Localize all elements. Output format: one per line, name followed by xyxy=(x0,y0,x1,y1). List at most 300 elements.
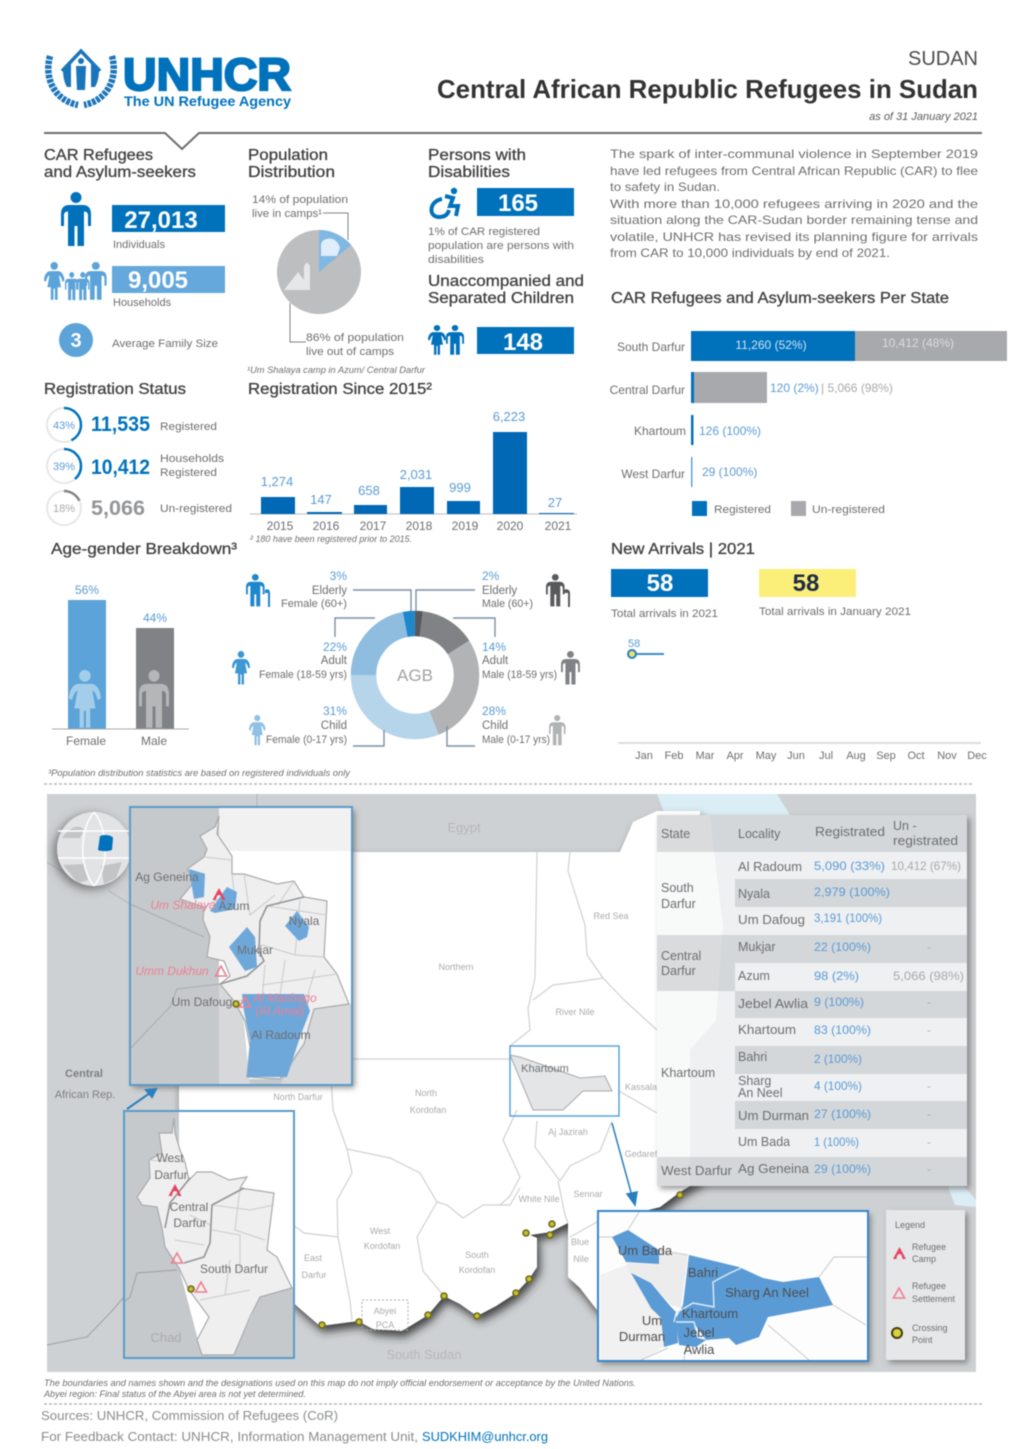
table locality column: Azum xyxy=(738,969,770,983)
text: disability note: population are persons with xyxy=(428,240,574,252)
legend xyxy=(692,501,885,516)
table un-registered column: 5,066 (98%) xyxy=(893,969,964,983)
arrow: to locality inset xyxy=(127,1089,156,1109)
table locality column xyxy=(738,860,809,1176)
stat: households: 9,005 xyxy=(128,267,188,294)
map legend xyxy=(886,1210,965,1360)
bar chart: gender: 56% xyxy=(75,583,99,597)
map base: neighbouring countries xyxy=(47,794,976,1372)
panel: refugees per state xyxy=(610,290,1007,516)
table un-registered column: 10,412 (67%) xyxy=(891,859,961,873)
map: Chad and CAR border xyxy=(47,1297,124,1345)
stat: registered: Registered xyxy=(160,421,217,433)
map: state boundaries xyxy=(293,852,657,1320)
heading xyxy=(248,147,335,181)
table un-registered column: - xyxy=(927,1109,931,1121)
stacked bar chart: 126 (100%) xyxy=(699,424,761,438)
table state column: Central xyxy=(661,949,701,963)
heading: Unaccompanied and xyxy=(428,273,584,290)
label: adult female: Adult xyxy=(321,655,348,667)
line chart: Apr xyxy=(726,750,744,762)
inset: refugee localities map xyxy=(130,807,352,1085)
bar chart: 2017 xyxy=(360,519,387,533)
table registered column: 22 (100%) xyxy=(814,940,871,954)
table locality column: Al Radoum xyxy=(738,860,802,874)
table state column: Darfur xyxy=(661,897,696,911)
heading: New Arrivals | 2021 xyxy=(611,541,755,558)
map labels: countries and states: East xyxy=(304,1253,323,1263)
map: state labels: Central xyxy=(170,1200,208,1214)
label: elderly female xyxy=(281,569,347,610)
label: child male: 28% xyxy=(482,704,506,718)
icon: male xyxy=(139,670,169,728)
map labels: countries and states: West xyxy=(370,1226,391,1236)
stat: households registered: Households xyxy=(160,453,225,465)
icon: camp Um Shalaya xyxy=(212,888,226,900)
table un-registered column: - xyxy=(927,1025,931,1037)
icon: settlement Umm Dukhun xyxy=(216,966,226,976)
map: locality labels: Al Mashago xyxy=(252,991,317,1005)
sources and contact: SUDKHIM@unhcr.org xyxy=(422,1429,548,1444)
line chart: Dec xyxy=(967,750,987,762)
stat: individuals: 27,013 xyxy=(124,207,198,234)
heading: Registration Status xyxy=(44,381,186,398)
stat: arrivals January 2021 xyxy=(759,569,911,618)
icon: adult female xyxy=(232,651,250,684)
table locality column: Jebel Awlia xyxy=(738,997,808,1011)
map labels: countries and states: African Rep. xyxy=(55,1089,115,1101)
map labels: countries and states: South Sudan xyxy=(386,1347,462,1362)
label: in camps xyxy=(252,194,348,220)
map labels: countries and states: South xyxy=(465,1250,489,1260)
table state column: West Darfur xyxy=(661,1164,732,1178)
map labels: countries and states: Central xyxy=(65,1068,103,1080)
icon: wheelchair xyxy=(431,188,458,217)
bar chart: 6,223 xyxy=(493,409,525,424)
map legend: Settlement xyxy=(912,1294,956,1304)
map: Darfur states xyxy=(137,1118,292,1355)
label: elderly male xyxy=(482,569,533,610)
map: locality labels: Ag Geneina xyxy=(135,870,199,884)
table locality column: Um Dafoug xyxy=(738,913,805,927)
text block: situation summary: situation along the CAR-Sudan border remaining tense and xyxy=(610,213,978,227)
bar chart: gender: Female xyxy=(66,734,106,748)
map labels: countries and states: Aj Jazirah xyxy=(548,1127,588,1137)
icon: crossing points on border xyxy=(318,1191,684,1329)
line chart: Aug xyxy=(846,750,866,762)
map labels: countries and states: Egypt xyxy=(447,820,481,835)
table header: Un - xyxy=(893,819,917,833)
table header xyxy=(661,819,958,848)
stat: average family size xyxy=(59,323,218,357)
label: out of camps xyxy=(306,332,404,358)
icon: children xyxy=(428,325,464,355)
table locality column: Khartoum xyxy=(738,1023,796,1037)
table un-registered column: - xyxy=(927,1164,931,1176)
label: out of camps: 86% of population xyxy=(306,332,404,344)
globe locator xyxy=(57,812,131,886)
map legend: Refugee xyxy=(912,1281,946,1291)
icon: crossing South Darfur xyxy=(187,1285,195,1293)
bar chart: 2020 xyxy=(497,519,524,533)
map: state labels: West xyxy=(156,1151,184,1165)
heading: Distribution xyxy=(248,164,335,181)
title block: Central African Republic Refugees in Sudan xyxy=(437,74,978,104)
table registered column: 83 (100%) xyxy=(814,1023,871,1037)
map labels: countries and states: Northern xyxy=(438,962,474,972)
icon: female xyxy=(69,670,101,728)
map: state labels: South Darfur xyxy=(200,1262,268,1276)
label: elderly male: Elderly xyxy=(482,585,517,597)
label: elderly male: Male (60+) xyxy=(482,598,533,610)
label: child female: Female (0-17 yrs) xyxy=(266,734,347,746)
map labels: countries and states xyxy=(55,820,658,1362)
table registered column: 5,090 (33%) xyxy=(814,859,885,873)
table registered column: 3,191 (100%) xyxy=(814,911,882,925)
stacked bar chart: South Darfur xyxy=(617,340,685,354)
line chart: 58 xyxy=(628,638,640,650)
map: locality labels: Durman xyxy=(619,1329,665,1344)
stat: 148 xyxy=(477,327,574,356)
stacked bar chart: West Darfur xyxy=(621,467,685,481)
header rule with notch xyxy=(44,133,982,149)
map labels: countries and states: Blue xyxy=(571,1237,589,1247)
stat: un-registered: 18% xyxy=(53,503,75,515)
heading: CAR Refugees and Asylum-seekers Per State xyxy=(611,290,949,307)
bar chart: 999 xyxy=(449,480,471,495)
map labels: countries and states: Gedaref xyxy=(625,1149,658,1159)
label: adult male: 14% xyxy=(482,640,506,654)
panel: registration status xyxy=(44,381,232,525)
map: locality labels: Awlia xyxy=(684,1342,715,1357)
footnote: ² 180 have been registered prior to 2015. xyxy=(250,534,412,544)
stat: registered: 43% xyxy=(53,420,75,432)
donut chart xyxy=(364,624,466,726)
table registered column: 2 (100%) xyxy=(814,1052,862,1066)
heading xyxy=(44,147,196,181)
heading: Separated Children xyxy=(428,290,574,307)
map: locality labels: Um Dafoug xyxy=(172,995,232,1009)
table header: registrated xyxy=(893,834,958,848)
map labels: countries and states: PCA xyxy=(376,1320,394,1330)
table locality column: Bahri xyxy=(738,1050,767,1064)
icon: elderly female xyxy=(246,574,270,607)
footnote: ¹Um Shalaya camp in Azum/ Central Darfur xyxy=(247,365,426,375)
stat: arrivals January 2021: Total arrivals in January 2021 xyxy=(759,606,911,618)
label: in camps: live in camps¹ xyxy=(252,208,322,220)
icon: elderly male xyxy=(546,574,570,607)
map: locality labels: Khartoum xyxy=(682,1306,738,1321)
table state column: Darfur xyxy=(661,964,696,978)
bar chart: 27 xyxy=(548,495,562,510)
stat: 165: 165 xyxy=(498,190,538,217)
label: child male xyxy=(482,704,550,746)
icon: crossing point xyxy=(891,1327,903,1339)
text block: situation summary: The spark of inter-communal violence in September 2019 xyxy=(610,147,978,161)
label: child female xyxy=(266,704,347,746)
arrow: to Khartoum inset xyxy=(612,1123,637,1205)
stacked bar chart: | 5,066 (98%) xyxy=(821,381,893,395)
label: adult male xyxy=(482,640,557,681)
map labels: countries and states: Kordofan xyxy=(410,1105,446,1115)
stacked bar chart: 29 (100%) xyxy=(702,465,757,479)
stat: households: Households xyxy=(113,297,172,309)
panel: CAR refugees and asylum-seekers xyxy=(44,147,225,357)
table locality column: Um Durman xyxy=(738,1109,809,1123)
stacked bar chart: 10,412 (48%) xyxy=(882,336,954,350)
inset locator: Khartoum state: Khartoum xyxy=(521,1063,569,1075)
map panel xyxy=(47,794,976,1372)
table registered column: 4 (100%) xyxy=(814,1079,862,1093)
heading: Population xyxy=(248,147,328,164)
bar chart: 2,031 xyxy=(400,467,432,482)
bar chart: gender: 44% xyxy=(143,611,167,625)
stacked bar chart: 11,260 (52%) xyxy=(735,338,807,352)
stat: arrivals January 2021: 58 xyxy=(793,570,819,597)
text block: situation summary: With more than 10,000 refugees arriving in 2020 and the xyxy=(610,197,978,211)
label: child female: Child xyxy=(321,720,347,732)
map labels: countries and states: Sennar xyxy=(573,1189,603,1199)
text block: situation summary: have led refugees from Central African Republic (CAR) to flee xyxy=(610,164,978,178)
table un-registered column xyxy=(891,859,964,1176)
legend: Un-registered xyxy=(812,504,885,516)
stat: households registered: 39% xyxy=(53,461,75,473)
footnote: ³Population distribution statistics are based on registered individuals only xyxy=(48,768,351,778)
line chart xyxy=(618,638,987,762)
icon: adult male xyxy=(561,651,580,684)
icon: crossing Um Dafoug xyxy=(232,1000,240,1008)
map labels: countries and states: Kassala xyxy=(625,1082,657,1092)
logo: UNHCR xyxy=(48,49,291,109)
text block: situation summary xyxy=(610,147,978,260)
icon: settlement Al Mashago xyxy=(240,997,250,1007)
label: elderly female: 3% xyxy=(330,569,347,583)
map labels: countries and states: Nile xyxy=(573,1254,589,1264)
bar chart: 2015 xyxy=(267,519,294,533)
stat: average family size: 3 xyxy=(70,330,82,352)
title block xyxy=(437,48,978,123)
label: adult male: Adult xyxy=(482,655,509,667)
map: locality labels: Nyala xyxy=(289,914,320,928)
map: locality labels: Um xyxy=(642,1313,662,1328)
map legend: Point xyxy=(912,1335,933,1345)
table locality column: Um Bada xyxy=(738,1135,790,1149)
line chart: May xyxy=(756,750,777,762)
sources and contact: Sources: UNHCR, Commission of Refugees (CoR) xyxy=(41,1408,338,1423)
map: locality labels: Um Bada xyxy=(618,1243,673,1258)
stat: households registered: 10,412 xyxy=(91,456,150,479)
map labels: countries and states: River Nile xyxy=(555,1007,595,1017)
label: in camps: 14% of population xyxy=(252,194,348,206)
logo wordmark: UNHCR xyxy=(123,49,291,100)
bar chart: 2021 xyxy=(545,519,572,533)
table un-registered column: - xyxy=(927,1137,931,1149)
bar chart: gender: Male xyxy=(141,734,167,748)
map labels: countries and states: Kordofan xyxy=(364,1241,400,1251)
stacked bar chart: 120 (2%) xyxy=(770,381,819,395)
map: locality labels: Bahri xyxy=(688,1265,718,1280)
line chart: Nov xyxy=(937,750,957,762)
bar chart xyxy=(250,409,577,533)
map legend: Camp xyxy=(912,1254,936,1264)
table header: Locality xyxy=(738,827,781,841)
icon: settlement Central Darfur xyxy=(172,1253,182,1263)
icon: camp West Darfur xyxy=(168,1184,182,1196)
bar chart: 2019 xyxy=(452,519,479,533)
label: child male: Male (0-17 yrs) xyxy=(482,734,550,746)
table un-registered column: - xyxy=(927,997,931,1009)
table state column: Khartoum xyxy=(661,1066,715,1080)
stat: total arrivals 2021 xyxy=(611,569,718,620)
bar chart: 147 xyxy=(310,492,332,507)
label: elderly female: Elderly xyxy=(312,585,347,597)
text block: situation summary: volatile, UNHCR has revised its planning figure for arrivals xyxy=(610,230,978,244)
label: adult female: 22% xyxy=(323,640,347,654)
stat: average family size: Average Family Size xyxy=(112,338,218,350)
label: child male: Child xyxy=(482,720,508,732)
panel: persons with disabilities xyxy=(428,147,574,266)
stat: households registered: Registered xyxy=(160,467,217,479)
bar chart: 1,274 xyxy=(261,474,293,489)
logo tagline: The UN Refugee Agency xyxy=(124,93,291,109)
icon: UNHCR hands and laurel emblem xyxy=(48,51,114,105)
map legend: Refugee xyxy=(912,1242,946,1252)
map labels: countries and states: Red Sea xyxy=(593,911,629,921)
table locality column: An Neel xyxy=(738,1086,782,1100)
line chart: Mar xyxy=(696,750,715,762)
map: locality labels: Al Radoum xyxy=(251,1028,311,1042)
line chart: Feb xyxy=(665,750,683,762)
map: locality labels: Azum xyxy=(219,899,249,913)
icon: tent xyxy=(321,238,340,256)
heading xyxy=(428,147,526,181)
label: adult female xyxy=(259,640,348,681)
table registered column xyxy=(814,859,890,1176)
icon: child male xyxy=(549,715,566,745)
label: out of camps: live out of camps xyxy=(306,346,395,358)
table registered column: 98 (2%) xyxy=(814,969,859,983)
table locality column: Mukjar xyxy=(738,940,776,954)
map: state labels xyxy=(150,1151,268,1345)
inset: Darfur states map xyxy=(124,1111,294,1358)
stacked bar chart xyxy=(610,331,1007,487)
text: disability note: disabilities xyxy=(428,254,485,266)
text: disability note: 1% of CAR registered xyxy=(428,226,540,238)
panel: new arrivals xyxy=(611,541,987,762)
panel: unaccompanied and separated children xyxy=(428,273,584,356)
line chart: Jun xyxy=(787,750,805,762)
stat: individuals xyxy=(112,205,225,251)
map: locality labels: Um Shalaya xyxy=(150,898,216,912)
map: locality labels: Mukjar xyxy=(237,943,273,957)
sources and contact xyxy=(41,1408,548,1444)
map: locality labels: Jebel xyxy=(683,1325,715,1340)
line chart: Oct xyxy=(907,750,925,762)
stat: registered: 11,535 xyxy=(91,413,150,436)
map: state labels: Darfur xyxy=(173,1216,207,1230)
table locality column: Ag Geneina xyxy=(738,1162,809,1176)
map: locality labels: Umm Dukhun xyxy=(135,964,209,978)
map: Red Sea xyxy=(657,794,790,815)
label: elderly female: Female (60+) xyxy=(281,598,347,610)
bar chart: gender xyxy=(52,583,189,748)
pie chart xyxy=(277,230,361,314)
table registered column: 1 (100%) xyxy=(814,1135,859,1149)
stacked bar chart: Central Darfur xyxy=(610,383,685,397)
heading: Registration Since 2015² xyxy=(248,381,433,398)
bar chart: 2016 xyxy=(313,519,340,533)
panel: registration since 2015 xyxy=(248,381,577,544)
table header: Registrated xyxy=(815,825,885,839)
map labels: countries and states: White Nile xyxy=(518,1194,560,1204)
line chart: Jan xyxy=(635,750,653,762)
table locality column: Nyala xyxy=(738,887,770,901)
data table: localities xyxy=(657,815,967,1186)
line chart: Jul xyxy=(819,750,833,762)
map: highlighted localities xyxy=(612,1230,833,1347)
table registered column: 9 (100%) xyxy=(814,995,864,1009)
text: disability note xyxy=(428,226,574,266)
line chart: Sep xyxy=(876,750,896,762)
map legend: Crossing xyxy=(912,1323,948,1333)
legend: Registered xyxy=(714,504,771,516)
map labels: countries and states: Abyei xyxy=(374,1306,396,1316)
map disclaimer: Abyei region: Final status of the Abyei area is not yet determined. xyxy=(43,1389,306,1399)
map: state labels: Darfur xyxy=(154,1168,188,1182)
heading: CAR Refugees xyxy=(44,147,153,164)
map: state labels: Chad xyxy=(150,1330,182,1345)
heading: Disabilities xyxy=(428,164,510,181)
stat: 165 xyxy=(477,188,574,217)
stat: un-registered: 5,066 xyxy=(91,497,145,520)
text block: situation summary: from CAR to 10,000 individuals by end of 2021. xyxy=(610,246,890,260)
map disclaimer: The boundaries and names shown and the designations used on this map do not imply official endorsement or acceptance by the United Nations. xyxy=(44,1378,636,1388)
stat: total arrivals 2021: 58 xyxy=(647,570,673,597)
map: Abyei dashed box xyxy=(362,1300,408,1330)
stat: un-registered xyxy=(47,491,232,525)
map: Darfur outline xyxy=(180,816,349,1079)
table state column: South xyxy=(661,881,694,895)
stacked bar chart: Khartoum xyxy=(634,424,686,438)
icon: child female xyxy=(249,715,266,745)
inset locator: Khartoum state xyxy=(510,1046,619,1116)
title block: as of 31 January 2021 xyxy=(869,111,978,123)
panel: population distribution xyxy=(247,147,426,375)
stat: households xyxy=(112,266,225,309)
map legend: Legend xyxy=(895,1220,925,1230)
table un-registered column: - xyxy=(927,1081,931,1093)
text block: situation summary: to safety in Sudan. xyxy=(610,180,720,194)
map: locality labels: Sharg An Neel xyxy=(725,1285,809,1300)
label: elderly male: 2% xyxy=(482,569,500,583)
label: child female: 31% xyxy=(323,704,347,718)
icon: family xyxy=(44,262,107,300)
table locality column: Sharg xyxy=(738,1074,771,1088)
heading: and Asylum-seekers xyxy=(44,164,196,181)
table registered column: 2,979 (100%) xyxy=(814,885,890,899)
label: adult male: Male (18-59 yrs) xyxy=(482,669,557,681)
icon: person xyxy=(61,192,91,246)
heading: Age-gender Breakdown³ xyxy=(51,541,238,558)
map disclaimer xyxy=(43,1378,636,1399)
stat: un-registered: Un-registered xyxy=(160,503,232,515)
stat: individuals: Individuals xyxy=(113,239,165,251)
donut chart: AGB xyxy=(397,666,433,685)
icon: settlement South Darfur xyxy=(196,1282,206,1292)
table registered column: 29 (100%) xyxy=(814,1162,871,1176)
icon: refugee settlement xyxy=(894,1288,904,1298)
panel: age-gender breakdown xyxy=(48,541,580,778)
